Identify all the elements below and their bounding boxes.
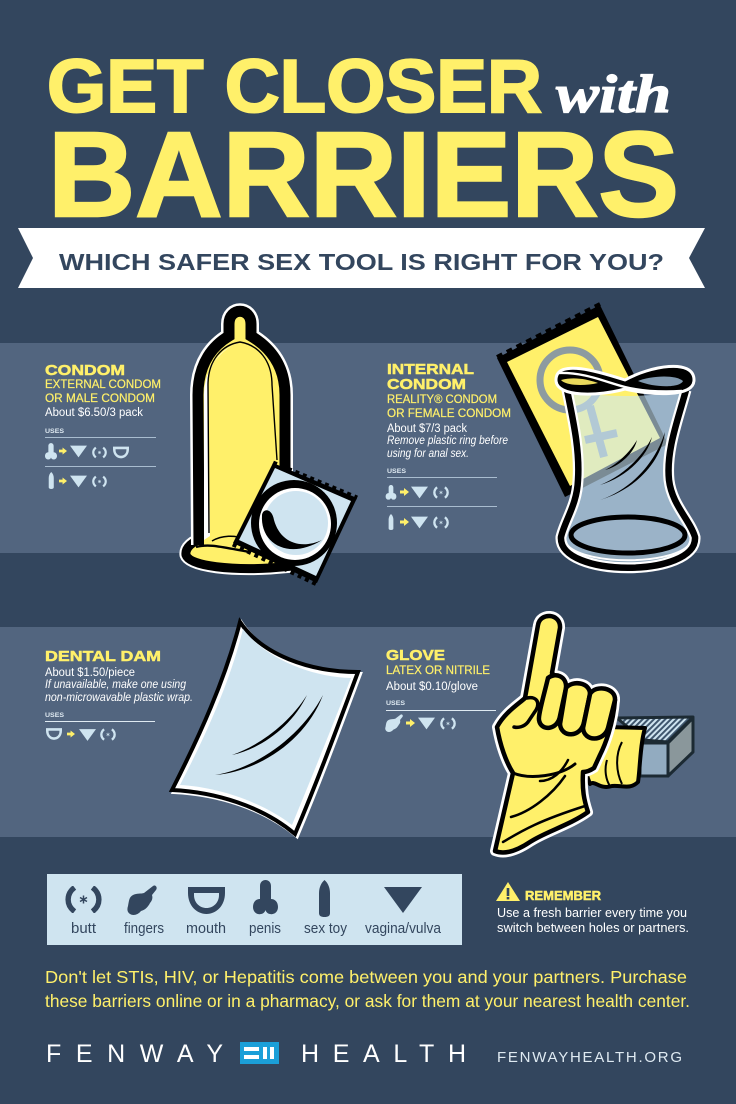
legend: sex toy: sex toy — [304, 921, 348, 937]
condom packet — [233, 463, 357, 584]
internal condom packet — [497, 304, 668, 497]
title word: with: with — [556, 64, 671, 124]
subheading: female: OR FEMALE CONDOM — [387, 408, 511, 420]
illustration: internal condom — [497, 304, 695, 568]
callout heading: REMEMBER — [525, 889, 601, 903]
subheading: external: EXTERNAL CONDOM — [45, 379, 161, 391]
price: About $0.10/glove — [386, 681, 478, 693]
box — [617, 717, 693, 776]
callout: remember — [496, 882, 689, 935]
panel: internal condom text — [386, 361, 511, 530]
condom body — [198, 311, 285, 545]
bottom ring — [571, 517, 685, 553]
condom base ring — [186, 538, 305, 569]
heading: internal: INTERNAL — [387, 361, 474, 378]
illustration: condom — [186, 311, 357, 584]
panel: band top — [0, 343, 736, 553]
logo word: health: HEALTH — [301, 1040, 466, 1068]
heading: glove: GLOVE — [386, 647, 445, 664]
price: About $7/3 pack — [387, 423, 467, 435]
fold lines — [503, 698, 585, 842]
logo mark — [240, 1042, 279, 1064]
uses row: sex toy — [49, 472, 106, 489]
heading: dental dam: DENTAL DAM — [45, 648, 161, 665]
uses row: sex toy — [389, 514, 448, 530]
subtitle ribbon — [18, 228, 705, 288]
creases — [600, 432, 665, 500]
panel: band bottom — [0, 627, 736, 837]
uses label: USES — [45, 428, 65, 435]
legend: butt: butt — [71, 921, 96, 937]
legend: fingers: fingers — [124, 921, 164, 937]
panel: glove text — [385, 647, 496, 732]
main glove — [495, 616, 615, 852]
condom sleeve — [561, 390, 695, 568]
message line 2: these barriers online or in a pharmacy, or ask for them at your nearest health center. — [45, 991, 690, 1011]
message line 1: Don't let STIs, HIV, or Hepatitis come between you and your partners. Purchase — [45, 967, 687, 987]
uses row: penis — [45, 443, 129, 460]
subtitle: WHICH SAFER SEX TOOL IS RIGHT FOR YOU? — [59, 249, 664, 275]
note line 1: Remove plastic ring before — [387, 435, 508, 447]
uses label: USES — [387, 468, 407, 475]
callout line 2: switch between holes or partners. — [497, 920, 689, 935]
title line: barriers: BARRIERS — [48, 106, 679, 242]
legend: penis — [249, 880, 281, 937]
callout line 1: Use a fresh barrier every time you — [497, 905, 687, 920]
note line 2: non-microwavable plastic wrap. — [45, 692, 193, 704]
closing message — [45, 967, 690, 1011]
heading: condom: CONDOM — [387, 376, 466, 393]
legend: vagina/vulva: vagina/vulva — [365, 921, 442, 937]
uses label: USES — [386, 700, 406, 707]
subheading: latex or nitrile: LATEX OR NITRILE — [386, 665, 490, 677]
heading: condom: CONDOM — [45, 362, 125, 379]
legend: sex toy — [304, 880, 348, 937]
second gloved hand — [585, 727, 645, 787]
uses row: mouth — [46, 728, 115, 741]
legend: mouth: mouth — [186, 921, 226, 937]
price: About $6.50/3 pack — [45, 407, 143, 419]
uses label: USES — [45, 712, 65, 719]
uses row: penis — [386, 485, 448, 500]
illustration: dental dam — [172, 622, 360, 836]
top twisted ring — [556, 366, 694, 394]
price: About $1.50/piece — [45, 667, 135, 679]
legend: mouth — [186, 887, 226, 937]
icon: warning triangle — [496, 882, 520, 901]
fingers — [539, 675, 615, 738]
panel: condom text — [45, 362, 161, 489]
illustration: glove — [495, 616, 693, 852]
logo word: fenway: FENWAY — [46, 1040, 223, 1068]
footer — [46, 1040, 682, 1068]
title — [47, 44, 679, 242]
legend: butt — [68, 888, 99, 937]
legend: penis: penis — [249, 921, 281, 937]
legend panel — [47, 874, 462, 945]
note line 1: If unavailable, make one using — [45, 679, 187, 691]
panel: dental dam text — [45, 648, 193, 741]
title line: get closer: GET CLOSER — [47, 44, 542, 128]
legend: fingers — [124, 886, 164, 937]
website: FENWAYHEALTH.ORG — [497, 1049, 682, 1066]
subheading: male: OR MALE CONDOM — [45, 393, 155, 405]
legend: vagina/vulva — [365, 887, 442, 937]
uses row: fingers — [385, 714, 455, 732]
subheading: reality: REALITY® CONDOM — [387, 394, 497, 406]
note line 2: using for anal sex. — [387, 448, 469, 460]
